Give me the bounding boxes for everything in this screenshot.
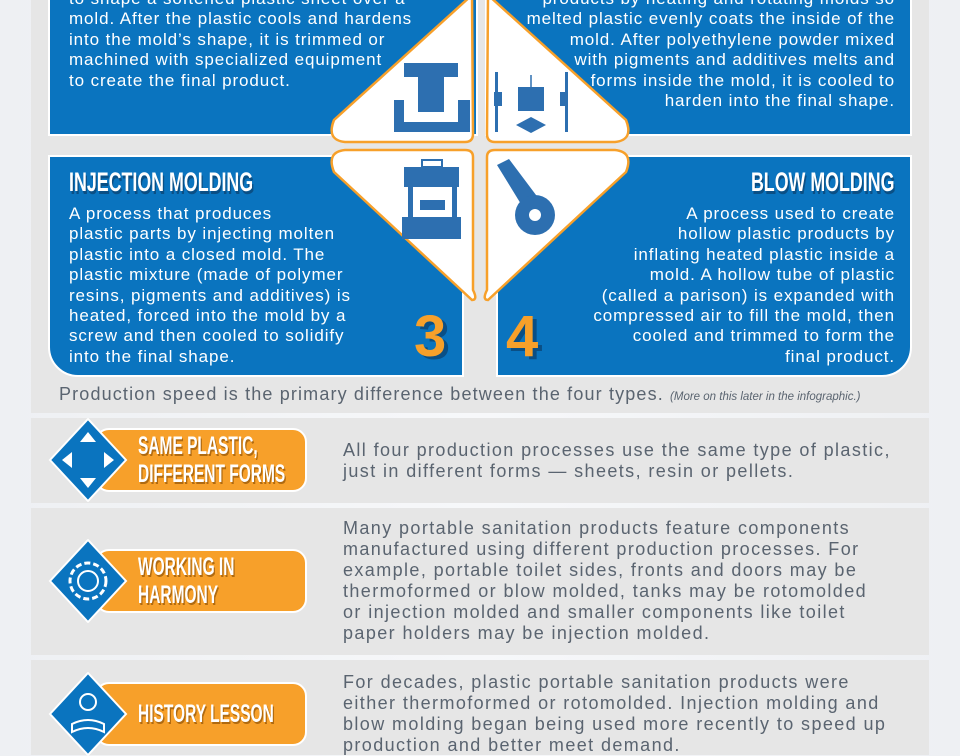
text: blow description: final product. — [785, 347, 895, 366]
row: history lesson — [31, 660, 929, 755]
text: blow description — [593, 204, 895, 366]
badge: history — [49, 672, 307, 756]
text: injection description: screw and then cooled to solidify — [69, 326, 344, 345]
text: blow description: compressed air to fill the mold, then — [593, 306, 895, 325]
text: thermoforming description: into the mold’s shape, it is trimmed or — [69, 30, 385, 49]
number 4: 4 — [506, 304, 538, 369]
text: harmony: Many portable sanitation products feature components — [343, 518, 850, 538]
text: history: For decades, plastic portable sanitation products were — [343, 672, 850, 692]
text: harmony: example, portable toilet sides, fronts and doors may be — [343, 560, 857, 580]
text: rotomolding description — [527, 0, 895, 110]
diamond icons — [330, 0, 630, 302]
text: harmony: or injection molded and smaller components like toilet — [343, 602, 846, 622]
text: history: blow molding began being used more recently to speed up — [343, 714, 886, 734]
caption: Production speed is the primary difference between the four types. (More on this later in the infographic.) — [59, 384, 861, 404]
text: blow description: mold. A hollow tube of plastic — [650, 265, 895, 284]
badge: same plastic: DIFFERENT FORMS — [138, 460, 285, 488]
badge: harmony: WORKING IN — [138, 553, 234, 581]
text: harmony: thermoformed or blow molded, tanks may be rotomolded — [343, 581, 867, 601]
text: harmony — [343, 518, 867, 643]
badge: same plastic: SAME PLASTIC, — [138, 432, 258, 460]
text: history: production and better meet demand. — [343, 735, 681, 755]
text: injection description: resins, pigments and additives) is — [69, 286, 351, 305]
text: blow description: A process used to create — [686, 204, 895, 223]
text: blow description: hollow plastic products by — [678, 224, 895, 243]
text: injection description: plastic parts by injecting molten — [69, 224, 335, 243]
text: rotomolding description: forms inside the mold, it is cooled to — [591, 71, 895, 90]
panel: blow molding — [496, 155, 912, 377]
text: rotomolding description: with pigments and additives melts and — [574, 50, 895, 69]
text: same plastic: All four production processes use the same type of plastic, — [343, 440, 891, 460]
icon: injection quadrant — [332, 150, 475, 300]
text: same plastic: just in different forms — sheets, resin or pellets. — [343, 461, 794, 481]
text: injection description: plastic mixture (made of polymer — [69, 265, 343, 284]
text: history — [343, 672, 886, 755]
icon: rotomolding quadrant — [487, 0, 628, 142]
text: history: either thermoformed or rotomolded. Injection molding and — [343, 693, 880, 713]
text: harmony: manufactured using different production processes. For — [343, 539, 860, 559]
icon: thermoforming quadrant — [332, 0, 473, 142]
text: thermoforming description: to create the final product. — [69, 71, 291, 90]
text: rotomolding description: melted plastic evenly coats the inside of the — [527, 9, 895, 28]
badge: same plastic — [49, 418, 307, 502]
row: working in harmony — [31, 508, 929, 655]
text: thermoforming description — [69, 0, 412, 90]
text: harmony: paper holders may be injection molded. — [343, 623, 710, 643]
panel: injection molding — [48, 155, 464, 377]
row: same plastic — [31, 418, 929, 503]
heading: blow molding: BLOW MOLDING — [750, 167, 894, 197]
main gray panel — [31, 0, 929, 413]
icon: blow molding quadrant — [485, 150, 628, 300]
text: injection description: heated, forced into the mold by a — [69, 306, 346, 325]
text: blow description: cooled and trimmed to form the — [633, 326, 895, 345]
text: injection description — [69, 204, 351, 366]
heading: injection molding: INJECTION MOLDING — [69, 167, 253, 197]
text: same plastic — [342, 440, 891, 481]
text: injection description: plastic into a closed mold. The — [69, 245, 325, 264]
badge: history: HISTORY LESSON — [138, 700, 274, 728]
text: injection description: into the final shape. — [69, 347, 235, 366]
panel: rotational molding — [485, 0, 912, 136]
text: blow description: inflating heated plastic inside a — [634, 245, 895, 264]
badge: harmony: HARMONY — [138, 581, 218, 609]
text: rotomolding description: mold. After polyethylene powder mixed — [570, 30, 895, 49]
text: rotomolding description: harden into the final shape. — [665, 91, 895, 110]
text: blow description: (called a parison) is expanded with — [602, 286, 895, 305]
panel: thermoforming — [48, 0, 478, 136]
text: thermoforming description: machined with specialized equipment — [69, 50, 382, 69]
badge: harmony — [49, 539, 307, 623]
number 3: 3 — [414, 304, 446, 369]
text: injection description: A process that produces — [69, 204, 272, 223]
text: thermoforming description: mold. After the plastic cools and hardens — [69, 9, 412, 28]
